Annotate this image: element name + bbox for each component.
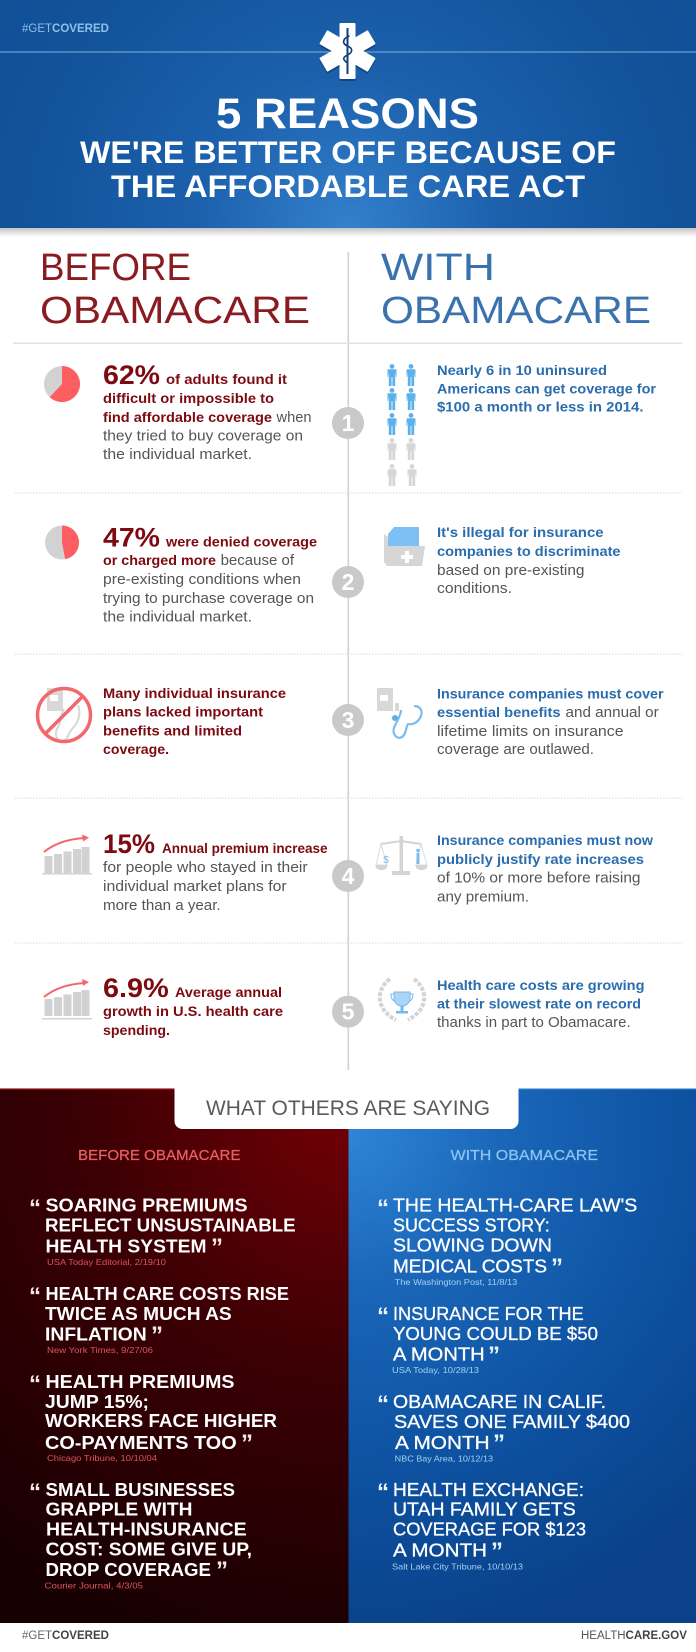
icon: star of life [319,23,376,81]
quote 2: YOUNG COULD BE $50 [393,1323,598,1344]
quote 1: USA Today Editorial, 2/19/10 [47,1257,166,1267]
quote 4: HEALTH-INSURANCE [46,1519,247,1540]
row 4 [42,829,653,914]
before text 4: Annual premium increase [162,840,328,856]
quote 1: “ [29,1195,41,1222]
row 5 [42,973,644,1038]
quote 2: TWICE AS MUCH AS [45,1303,232,1324]
heading: before obamacare: OBAMACARE [40,290,310,332]
quote 2: ” [488,1342,500,1369]
quote 2: HEALTH CARE COSTS RISE [46,1283,289,1304]
quote 2: USA Today, 10/28/13 [392,1365,479,1375]
panel: quotes before obamacare [0,1088,348,1623]
before text 4: individual market plans for [103,879,287,895]
title: WE'RE BETTER OFF BECAUSE OF [80,134,616,170]
icon: scales: $ [383,855,389,866]
quote 4 [377,1479,586,1571]
quote 2: ” [151,1322,163,1349]
before text 1: difficult or impossible to [103,390,274,406]
before text 5: spending. [103,1022,170,1038]
quote 4: SMALL BUSINESSES [46,1479,235,1500]
with text 4: Insurance companies must now [437,832,653,848]
with text 3: and annual or [566,705,659,721]
quote 3: OBAMACARE IN CALIF. [393,1391,606,1412]
with text 2: conditions. [437,581,512,597]
quote 3: Chicago Tribune, 10/10/04 [47,1453,157,1463]
before text 3: coverage. [103,741,169,757]
icon: folder [384,527,425,566]
site url: CARE.GOV [626,1630,687,1642]
with text 4: publicly justify rate increases [437,851,644,867]
with text 2: companies to discriminate [437,543,621,559]
with text 4: of 10% or more before raising [437,871,640,887]
quote 1: MEDICAL COSTS [393,1255,547,1276]
with text 3: Insurance companies must cover [437,686,664,702]
quote 3: WORKERS FACE HIGHER [45,1410,277,1431]
column rules [13,252,682,1070]
before text 2: trying to purchase coverage on [103,591,314,607]
quote 3 [377,1391,630,1464]
title [80,90,616,204]
quote 3: SAVES ONE FAMILY $400 [394,1411,630,1432]
icon: rising bar chart [42,979,92,1020]
title: 5 REASONS [216,90,479,138]
quote 3: A MONTH [395,1432,490,1453]
hashtag footer: COVERED [52,1630,109,1642]
panel heading: WITH OBAMACARE [450,1147,598,1164]
quote 4: COST: SOME GIVE UP, [46,1539,252,1560]
quote 2: “ [29,1283,41,1310]
before text 4: 15% [103,829,155,859]
with text 5: at their slowest rate on record [437,995,641,1011]
heading: before obamacare: BEFORE [40,247,191,289]
quote 1: “ [377,1195,389,1222]
before text 1: find affordable coverage [103,409,272,425]
hashtag footer: #GET [22,1630,52,1642]
number 5 [332,996,364,1028]
header banner [0,0,696,237]
before text 1: they tried to buy coverage on [103,428,303,444]
with text 1: $100 a month or less in 2014. [437,398,644,414]
quote 3: “ [377,1391,389,1418]
quote 4: COVERAGE FOR $123 [393,1519,586,1540]
number 3: 3 [342,707,354,733]
heading: before obamacare [40,247,310,332]
quote 2: INSURANCE FOR THE [393,1303,584,1324]
title: THE AFFORDABLE CARE ACT [111,168,585,204]
icon: no stethoscope [38,688,90,742]
before text 2: pre-existing conditions when [103,572,301,588]
number 3 [332,704,364,736]
before text 5: Average annual [175,984,282,1000]
number 5: 5 [342,999,355,1025]
with text 3: coverage are outlawed. [437,742,594,758]
footer [0,1623,696,1652]
before text 3 [103,685,286,757]
before text 2: the individual market. [103,610,252,626]
site url: HEALTH [581,1630,626,1642]
number 4: 4 [342,863,355,889]
quote 4: GRAPPLE WITH [46,1499,192,1520]
quote 1 [29,1195,296,1267]
number 1: 1 [342,410,355,436]
heading: with obamacare [381,247,651,332]
before text 2: or charged more [103,552,216,568]
quote 1: SOARING PREMIUMS [46,1195,248,1216]
quote 4: ” [216,1557,228,1584]
before text 4: for people who stayed in their [103,860,308,876]
before text 3: benefits and limited [103,723,242,739]
with text 4 [437,832,653,906]
quote 3: JUMP 15%; [45,1391,149,1412]
with text 1: Americans can get coverage for [437,380,657,396]
quote 1: THE HEALTH-CARE LAW'S [393,1195,637,1216]
row 3 [38,685,664,758]
with text 4: any premium. [437,890,529,906]
before text 4: more than a year. [103,898,221,914]
panel: quotes with obamacare [348,1088,696,1623]
number 2 [332,566,364,598]
before text 3: plans lacked important [103,704,263,720]
quote 4: A MONTH [393,1540,487,1561]
quote 3: CO-PAYMENTS TOO [45,1432,237,1453]
before text 2: because of [221,553,295,569]
with text 3: essential benefits [437,704,561,720]
icon: trophy with laurels [380,979,424,1020]
quote 2 [29,1283,289,1355]
heading: with obamacare: OBAMACARE [381,290,651,332]
before text 2 [103,523,317,626]
quote 1: ” [551,1254,563,1281]
before text 1 [103,360,312,463]
with text 1 [437,362,657,414]
with text 2: based on pre-existing [437,563,584,579]
with text 3: lifetime limits on insurance [437,724,624,740]
heading: with obamacare: WITH [381,247,495,289]
tab: what others are saying: WHAT OTHERS ARE SAYING [206,1097,490,1120]
quote 4: HEALTH EXCHANGE: [393,1479,584,1500]
with text 5: Health care costs are growing [437,977,644,993]
icon: scales [376,836,428,875]
quote 3: “ [29,1371,41,1398]
before text 1: 62% [103,360,160,390]
row 1 [44,360,657,486]
number 2: 2 [342,569,354,595]
with text 5 [437,977,644,1031]
with text 2: It's illegal for insurance [437,524,604,540]
quote 1: SLOWING DOWN [393,1235,552,1256]
with text 3 [437,686,664,758]
quote 1 [377,1195,637,1287]
with text 1: Nearly 6 in 10 uninsured [437,362,607,378]
quote 4: Salt Lake City Tribune, 10/10/13 [392,1561,523,1571]
number 1 [332,407,364,439]
quote 4 [29,1479,252,1591]
before text 5: 6.9% [103,973,169,1003]
quote 2: A MONTH [393,1344,485,1365]
quote 1: REFLECT UNSUSTAINABLE [45,1215,296,1236]
quote 2 [377,1303,598,1375]
quote 1: HEALTH SYSTEM [46,1236,206,1257]
quote 1: The Washington Post, 11/8/13 [395,1277,518,1287]
before text 2: were denied coverage [165,534,317,550]
quote 2: INFLATION [45,1324,147,1345]
tab: what others are saying [174,1088,518,1129]
quote 2: “ [377,1303,389,1330]
icon: people 6 of 10 [388,364,416,486]
before text 1: of adults found it [166,371,287,387]
quote 4: ” [491,1538,503,1565]
quote 3: HEALTH PREMIUMS [46,1371,235,1392]
with text 2 [437,524,621,597]
number 4 [332,860,364,892]
quote 4: DROP COVERAGE [46,1559,211,1580]
quote 4: UTAH FAMILY GETS [393,1499,576,1520]
before text 5: growth in U.S. health care [103,1003,283,1019]
row 2 [45,523,621,626]
quote 1: SUCCESS STORY: [393,1215,550,1236]
quote 1: ” [211,1234,223,1261]
before text 1: when [275,410,312,426]
quote 4: Courier Journal, 4/3/05 [44,1581,143,1591]
quote 4: “ [29,1479,41,1506]
quote 3: ” [241,1430,253,1457]
icon: pie chart 62 percent [44,366,80,402]
quote 3: ” [493,1430,505,1457]
icon: pie chart 47 percent [45,525,79,560]
panel heading: BEFORE OBAMACARE [78,1147,240,1164]
quote 3: NBC Bay Area, 10/12/13 [395,1454,493,1464]
hashtag top: COVERED [52,23,109,35]
before text 4 [103,829,328,914]
quote 2: New York Times, 9/27/06 [47,1345,153,1355]
before text 3: Many individual insurance [103,685,286,701]
before text 1: the individual market. [103,447,252,463]
hashtag top: #GET [22,23,52,35]
icon: stethoscope [377,688,422,738]
before text 2: 47% [103,523,160,553]
quote 4: “ [377,1479,389,1506]
with text 5: thanks in part to Obamacare. [437,1015,631,1031]
quote 3 [29,1371,277,1463]
before text 5 [103,973,283,1038]
icon: rising bar chart [42,834,92,874]
